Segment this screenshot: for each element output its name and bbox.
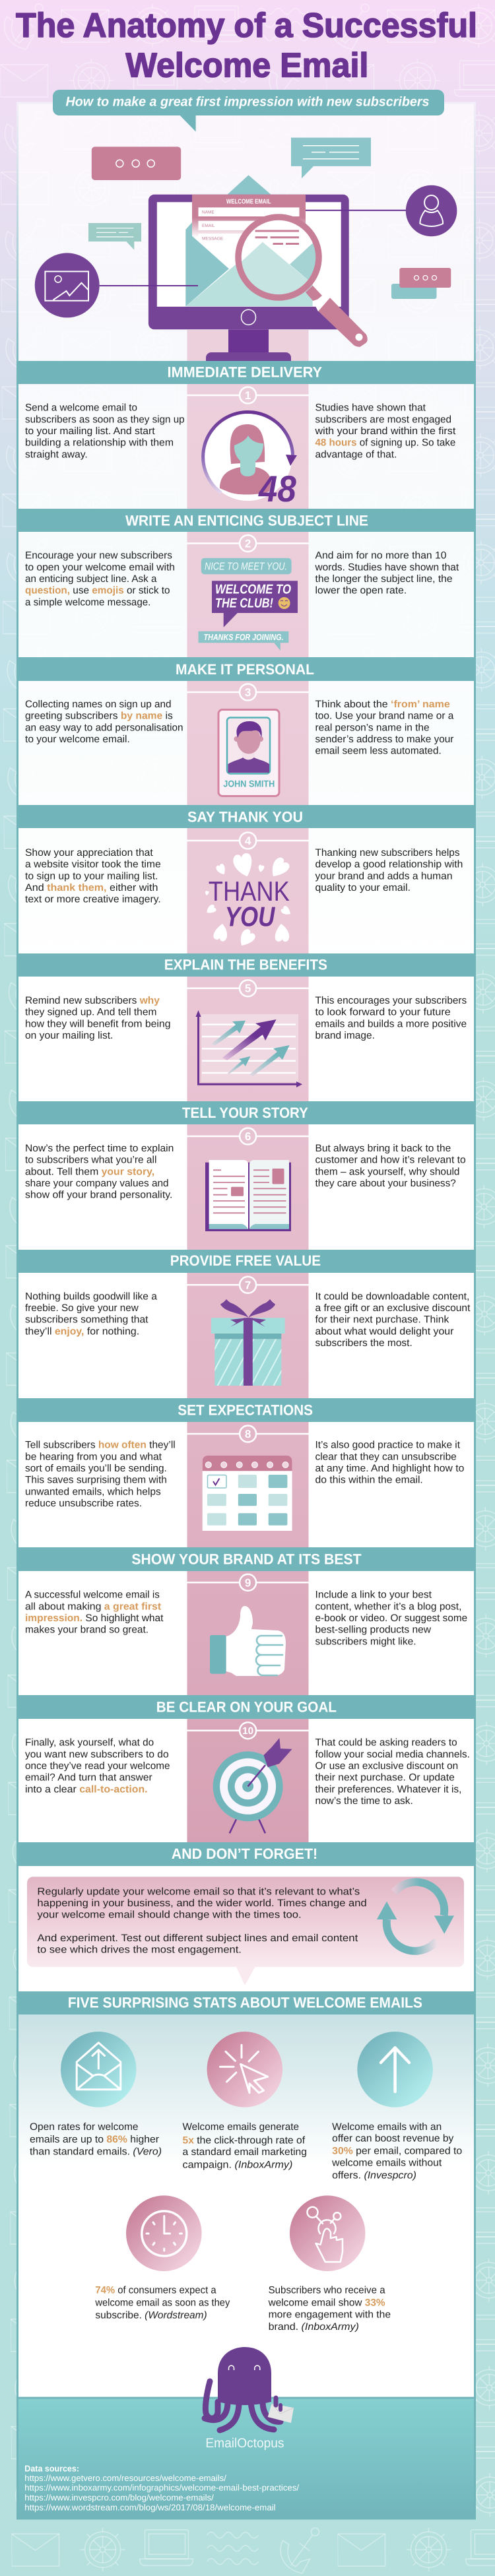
text right: with your brand within the first <box>314 426 456 437</box>
heading: FIVE SURPRISING STATS ABOUT WELCOME EMAILS <box>68 1994 422 2011</box>
callout text: to see which drives the most engagement. <box>37 1945 242 1956</box>
text right: advantage of that. <box>315 449 397 460</box>
stat 5: more engagement with the <box>269 2309 391 2320</box>
text right <box>315 1291 471 1349</box>
text left: about. Tell them your story, <box>25 1166 154 1177</box>
text left: how they will benefit from being <box>25 1018 170 1029</box>
text left: greeting subscribers by name is <box>25 711 173 722</box>
text right: But always bring it back to the <box>315 1143 451 1154</box>
number badge <box>187 1128 309 1144</box>
icon: gift box <box>211 1299 285 1386</box>
text left: Send a welcome email to <box>25 402 137 414</box>
icon: name card <box>218 710 279 796</box>
data sources: https://www.wordstream.com/blog/ws/2017/08/18/welcome-email <box>24 2502 276 2512</box>
text right <box>315 699 454 757</box>
text left: makes your brand so great. <box>25 1625 148 1636</box>
callout text <box>37 1886 367 1956</box>
heading: AND DON’T FORGET! <box>172 1846 317 1862</box>
text left: reduce unsubscribe rates. <box>25 1498 142 1509</box>
text left <box>25 699 183 745</box>
callout text: Regularly update your welcome email so that it’s relevant to what’s <box>37 1886 360 1897</box>
icon: thank you lettering: YOU <box>225 901 276 932</box>
icon: name card: JOHN SMITH <box>223 778 275 789</box>
text left: building a relationship with them <box>25 437 174 449</box>
icon: thank you lettering: THANK <box>209 876 290 907</box>
welcome form <box>192 195 306 247</box>
text left: text or more creative imagery. <box>25 894 161 905</box>
text right: about what would delight your <box>315 1326 453 1337</box>
text left: A successful welcome email is <box>25 1590 160 1601</box>
text right: Studies have shown that <box>315 402 426 414</box>
text right: customer and how it’s relevant to <box>315 1155 466 1166</box>
text right: sender’s address to make your <box>315 734 453 745</box>
text right: Thanking new subscribers helps <box>315 847 460 858</box>
text left <box>25 1440 176 1509</box>
text right <box>315 995 467 1041</box>
callout bubble <box>27 1877 464 1985</box>
text left: subscribers as soon as they sign up <box>25 414 185 425</box>
section: 7 free value <box>16 1250 476 1386</box>
icon: subject line bubbles <box>198 558 298 651</box>
icon: woman with 48 hour clock <box>203 412 297 509</box>
text right <box>315 1590 467 1647</box>
text right: their next purchase. Or update <box>315 1772 455 1784</box>
text right: do this within the email. <box>315 1475 423 1486</box>
illustration: hero monitor and welcome email <box>35 138 457 361</box>
stat 4: welcome email as soon as they <box>94 2298 230 2309</box>
heading: BE CLEAR ON YOUR GOAL <box>156 1698 337 1715</box>
text right: That could be asking readers to <box>315 1737 457 1749</box>
connector: profile <box>306 210 406 211</box>
number badge: 4 <box>245 835 251 847</box>
stat 5: Subscribers who receive a <box>269 2285 385 2296</box>
text left: straight away. <box>25 449 88 460</box>
text left <box>25 1143 174 1201</box>
title: Welcome Email <box>125 47 368 85</box>
text left: show off your brand personality. <box>25 1190 172 1201</box>
text left: share your company values and <box>25 1178 169 1189</box>
speech bubble: pink dots <box>92 146 181 180</box>
number badge: 9 <box>245 1576 251 1589</box>
text right: emails and builds a more positive <box>315 1018 467 1029</box>
icon: refresh cycle <box>377 1882 454 1951</box>
number badge <box>187 833 309 849</box>
data sources: https://www.getvero.com/resources/welcome-emails/ <box>24 2473 226 2483</box>
number badge <box>187 1425 309 1442</box>
callout text: And experiment. Test out different subject lines and email content <box>37 1933 358 1944</box>
section: 9 brand <box>16 1547 476 1676</box>
text left: Show your appreciation that <box>25 847 153 858</box>
magnifying glass <box>224 217 368 347</box>
text left: an enticing subject line. Ask a <box>25 573 157 585</box>
heading <box>16 1101 476 1124</box>
text right <box>315 1143 466 1189</box>
welcome form: MESSAGE <box>202 236 224 241</box>
text right: at any time. And highlight how to <box>315 1463 464 1474</box>
number badge: 7 <box>245 1279 251 1291</box>
text right: brand image. <box>315 1030 375 1041</box>
text right: to look forward to your future <box>315 1007 451 1018</box>
icon: octopus mascot <box>205 2347 294 2430</box>
text right: subscribers are most engaged <box>315 414 451 425</box>
heading <box>16 953 476 977</box>
text right: too. Use your brand name or a <box>315 711 454 722</box>
icon: thumbs up <box>210 1606 286 1676</box>
text right <box>315 847 463 893</box>
connector: image <box>100 285 198 286</box>
section: five surprising stats <box>16 1991 476 2333</box>
text left: all about making a great first <box>25 1601 161 1612</box>
text left: unwanted emails, which helps <box>25 1486 161 1497</box>
open envelope <box>185 222 313 306</box>
stat 2: 5x the click-through rate of <box>182 2135 306 2146</box>
number badge: 5 <box>245 982 251 995</box>
number badge: 2 <box>245 537 251 550</box>
stat 1: Open rates for welcome <box>30 2121 139 2133</box>
heading <box>16 1842 476 1866</box>
text right: subscribers might like. <box>315 1636 416 1647</box>
text left: subscribers something that <box>25 1314 148 1326</box>
text right: develop a good relationship with <box>315 859 463 870</box>
speech bubbles: pink on teal <box>391 268 451 299</box>
text right: follow your social media channels. <box>315 1749 470 1760</box>
heading <box>16 1695 476 1719</box>
welcome form: WELCOME EMAIL <box>226 199 271 206</box>
icon: image circle <box>35 253 100 317</box>
number badge <box>187 387 309 404</box>
text left: email? And turn that answer <box>25 1772 152 1784</box>
text left: Nothing builds goodwill like a <box>25 1291 157 1302</box>
text right: the longer the subject line, the <box>315 573 453 585</box>
data sources: https://www.invespcro.com/blog/welcome-emails/ <box>24 2493 214 2503</box>
text right: them – ask yourself, why should <box>315 1166 459 1177</box>
number badge: 8 <box>245 1428 251 1440</box>
text right: Include a link to your best <box>315 1590 432 1601</box>
text right: 48 hours of signing up. So take <box>315 437 455 449</box>
text left: This saves surprising them with <box>25 1475 167 1486</box>
section: and don't forget <box>16 1842 476 1985</box>
data sources: Data sources: <box>24 2464 79 2474</box>
section: 8 expectations <box>16 1398 476 1531</box>
icon: growth chart <box>195 1010 302 1087</box>
text right: they care about your business? <box>315 1178 456 1189</box>
text right: your brand and adds a human <box>315 870 453 882</box>
heading: WRITE AN ENTICING SUBJECT LINE <box>125 513 368 529</box>
text right: And aim for no more than 10 <box>315 550 446 562</box>
stat 4 <box>94 2195 230 2321</box>
text left: freebie. So give your new <box>25 1303 139 1314</box>
text left <box>25 847 161 905</box>
stat 2: campaign. (InboxArmy) <box>182 2159 292 2170</box>
text left: question, use emojis or stick to <box>25 585 170 596</box>
stat 2: Welcome emails generate <box>182 2121 299 2133</box>
icon: open book <box>205 1160 291 1231</box>
heading: EXPLAIN THE BENEFITS <box>164 956 327 973</box>
section: 10 goal <box>16 1695 476 1833</box>
text right: lower the open rate. <box>315 585 407 596</box>
stat 2 <box>182 2032 307 2170</box>
text right: This encourages your subscribers <box>315 995 467 1006</box>
data sources <box>24 2464 299 2512</box>
heading: SHOW YOUR BRAND AT ITS BEST <box>131 1551 362 1567</box>
text right <box>315 1737 470 1807</box>
text right: for their next purchase. Think <box>315 1314 449 1326</box>
speech bubble: small green <box>88 223 141 250</box>
text left: Collecting names on sign up and <box>25 699 172 710</box>
text right: their preferences. Whatever it is, <box>315 1784 461 1795</box>
icon: calendar <box>203 1456 292 1531</box>
section: 3 personal <box>16 657 476 796</box>
stat 3: welcome emails without <box>331 2157 442 2168</box>
brand name: EmailOctopus <box>205 2436 284 2451</box>
icon: subject line bubbles: THE CLUB! <box>215 596 273 611</box>
text right <box>314 402 456 460</box>
heading <box>16 361 476 384</box>
text left <box>25 1737 170 1795</box>
text left: they’ll enjoy, for nothing. <box>25 1326 139 1337</box>
text right: It could be downloadable content, <box>315 1291 469 1302</box>
icon: profile circle <box>406 185 457 236</box>
title: The Anatomy of a Successful <box>16 7 477 45</box>
text right <box>315 1440 464 1486</box>
text left: you want new subscribers to do <box>25 1749 169 1760</box>
number badge <box>187 1574 309 1591</box>
welcome form: NAME <box>202 210 214 215</box>
stat 1 <box>30 2032 162 2158</box>
heading <box>16 1398 476 1422</box>
text left <box>25 1291 157 1337</box>
number badge <box>187 1277 309 1293</box>
text right: a free gift or an exclusive discount <box>315 1303 471 1314</box>
text right: Or use an exclusive discount on <box>315 1760 458 1772</box>
icon: thank you lettering <box>205 851 292 950</box>
text right: words. Studies have shown that <box>314 562 459 573</box>
stat 3: offers. (Invespcro) <box>332 2170 416 2181</box>
number badge <box>187 684 309 701</box>
number badge <box>187 980 309 996</box>
text right: email seem less automated. <box>315 746 442 757</box>
text left: to sign up to your mailing list. <box>25 870 158 882</box>
text right: real person’s name in the <box>315 722 430 733</box>
icon: target and arrow <box>213 1738 292 1833</box>
stat 3: Welcome emails with an <box>332 2121 442 2133</box>
icon: woman with 48 hour clock: 48 <box>258 468 297 509</box>
welcome form: EMAIL <box>202 224 215 228</box>
number badge <box>187 1722 309 1739</box>
text right: now’s the time to ask. <box>315 1795 413 1807</box>
text left: on your mailing list. <box>25 1030 113 1041</box>
icon: subject line bubbles: NICE TO MEET YOU. <box>205 561 287 572</box>
text left: to subscribers what you’re all <box>25 1155 156 1166</box>
text left: to open your welcome email with <box>25 562 175 573</box>
monitor <box>148 195 349 361</box>
heading: TELL YOUR STORY <box>182 1105 308 1121</box>
section: 5 benefits <box>16 953 476 1087</box>
text right: clear that they can unsubscribe <box>315 1451 457 1462</box>
envelope back flap <box>227 175 271 195</box>
text left: Now’s the perfect time to explain <box>25 1143 174 1154</box>
text left: Finally, ask yourself, what do <box>25 1737 154 1749</box>
heading <box>16 509 476 532</box>
stats background <box>18 2014 474 2168</box>
stat 3: offer can boost revenue by <box>332 2133 454 2144</box>
section: 4 thank you <box>16 805 476 950</box>
stat 5: brand. (InboxArmy) <box>269 2321 359 2333</box>
icon: subject line bubbles: WELCOME TO <box>215 582 291 596</box>
number badge: 6 <box>245 1130 251 1143</box>
text left: they signed up. And tell them <box>25 1007 156 1018</box>
number badge <box>187 535 309 552</box>
footer panel <box>17 2398 475 2519</box>
text left: impression. So highlight what <box>25 1613 164 1624</box>
heading <box>16 657 476 681</box>
section: 2 subject line <box>16 509 476 651</box>
text left: once they’ve read your welcome <box>25 1760 170 1772</box>
stat 4: subscribe. (Wordstream) <box>95 2310 207 2321</box>
text right: best-selling products new <box>315 1625 432 1636</box>
heading: SAY THANK YOU <box>187 808 303 825</box>
text left: Remind new subscribers why <box>25 995 160 1006</box>
callout text: your welcome email should change with the times too. <box>37 1910 302 1921</box>
text left: a simple welcome message. <box>25 596 150 608</box>
heading <box>16 1250 476 1273</box>
heading: SET EXPECTATIONS <box>178 1402 313 1419</box>
text right: e-book or video. Or suggest some <box>315 1613 467 1624</box>
number badge: 10 <box>242 1725 253 1737</box>
callout text: happening in your business, and the wider world. Times change and <box>37 1898 367 1909</box>
section: 6 story <box>16 1101 476 1231</box>
text right: quality to your email. <box>315 882 411 893</box>
subtitle ribbon: How to make a great first impression with new subscribers <box>66 95 429 110</box>
stat 4: 74% of consumers expect a <box>95 2285 216 2296</box>
speech bubble: teal lines <box>291 138 371 178</box>
stat 3 <box>331 2032 462 2181</box>
stat 1: emails are up to 86% higher <box>30 2134 159 2145</box>
text left: sort of emails you’ll be sending. <box>25 1463 167 1474</box>
text right: It’s also good practice to make it <box>315 1440 461 1451</box>
heading <box>16 1991 476 2014</box>
footer <box>17 2347 475 2519</box>
heading: MAKE IT PERSONAL <box>176 661 314 678</box>
text left <box>25 550 175 608</box>
text right: content, whether it’s a blog post, <box>315 1601 461 1612</box>
text right: subscribers the most. <box>315 1337 412 1349</box>
stat 1: than standard emails. (Vero) <box>30 2146 162 2158</box>
text left: be hearing from you and what <box>25 1451 162 1462</box>
text left: to your mailing list. And start <box>25 426 155 437</box>
subtitle ribbon <box>53 90 444 132</box>
text left: Tell subscribers how often they’ll <box>25 1440 176 1451</box>
text left: to your welcome email. <box>25 734 130 745</box>
stat 5 <box>268 2195 391 2333</box>
number badge: 1 <box>245 389 251 402</box>
text left: an easy way to add personalisation <box>25 722 183 733</box>
number badge: 3 <box>245 686 251 699</box>
stat 5: welcome email show 33% <box>268 2298 385 2309</box>
icon: subject line bubbles: THANKS FOR JOINING. <box>203 632 284 642</box>
title <box>16 7 477 85</box>
heading <box>16 1547 476 1571</box>
data sources: https://www.inboxarmy.com/infographics/welcome-email-best-practices/ <box>24 2483 299 2493</box>
stat 2: a standard email marketing <box>182 2146 307 2158</box>
text left <box>25 1590 164 1636</box>
heading <box>16 805 476 828</box>
heading: PROVIDE FREE VALUE <box>170 1252 321 1269</box>
section: 1 immediate delivery <box>16 361 476 509</box>
text left: a website visitor took the time <box>25 859 161 870</box>
text left: into a clear call-to-action. <box>25 1784 148 1795</box>
text right: Think about the ‘from’ name <box>315 699 450 710</box>
heading: IMMEDIATE DELIVERY <box>168 364 322 381</box>
text left: And thank them, either with <box>25 882 158 893</box>
text left: Encourage your new subscribers <box>25 550 172 562</box>
stat 3: 30% per email, compared to <box>332 2146 462 2157</box>
text left <box>25 402 185 460</box>
text right <box>314 550 459 596</box>
text left <box>25 995 170 1041</box>
